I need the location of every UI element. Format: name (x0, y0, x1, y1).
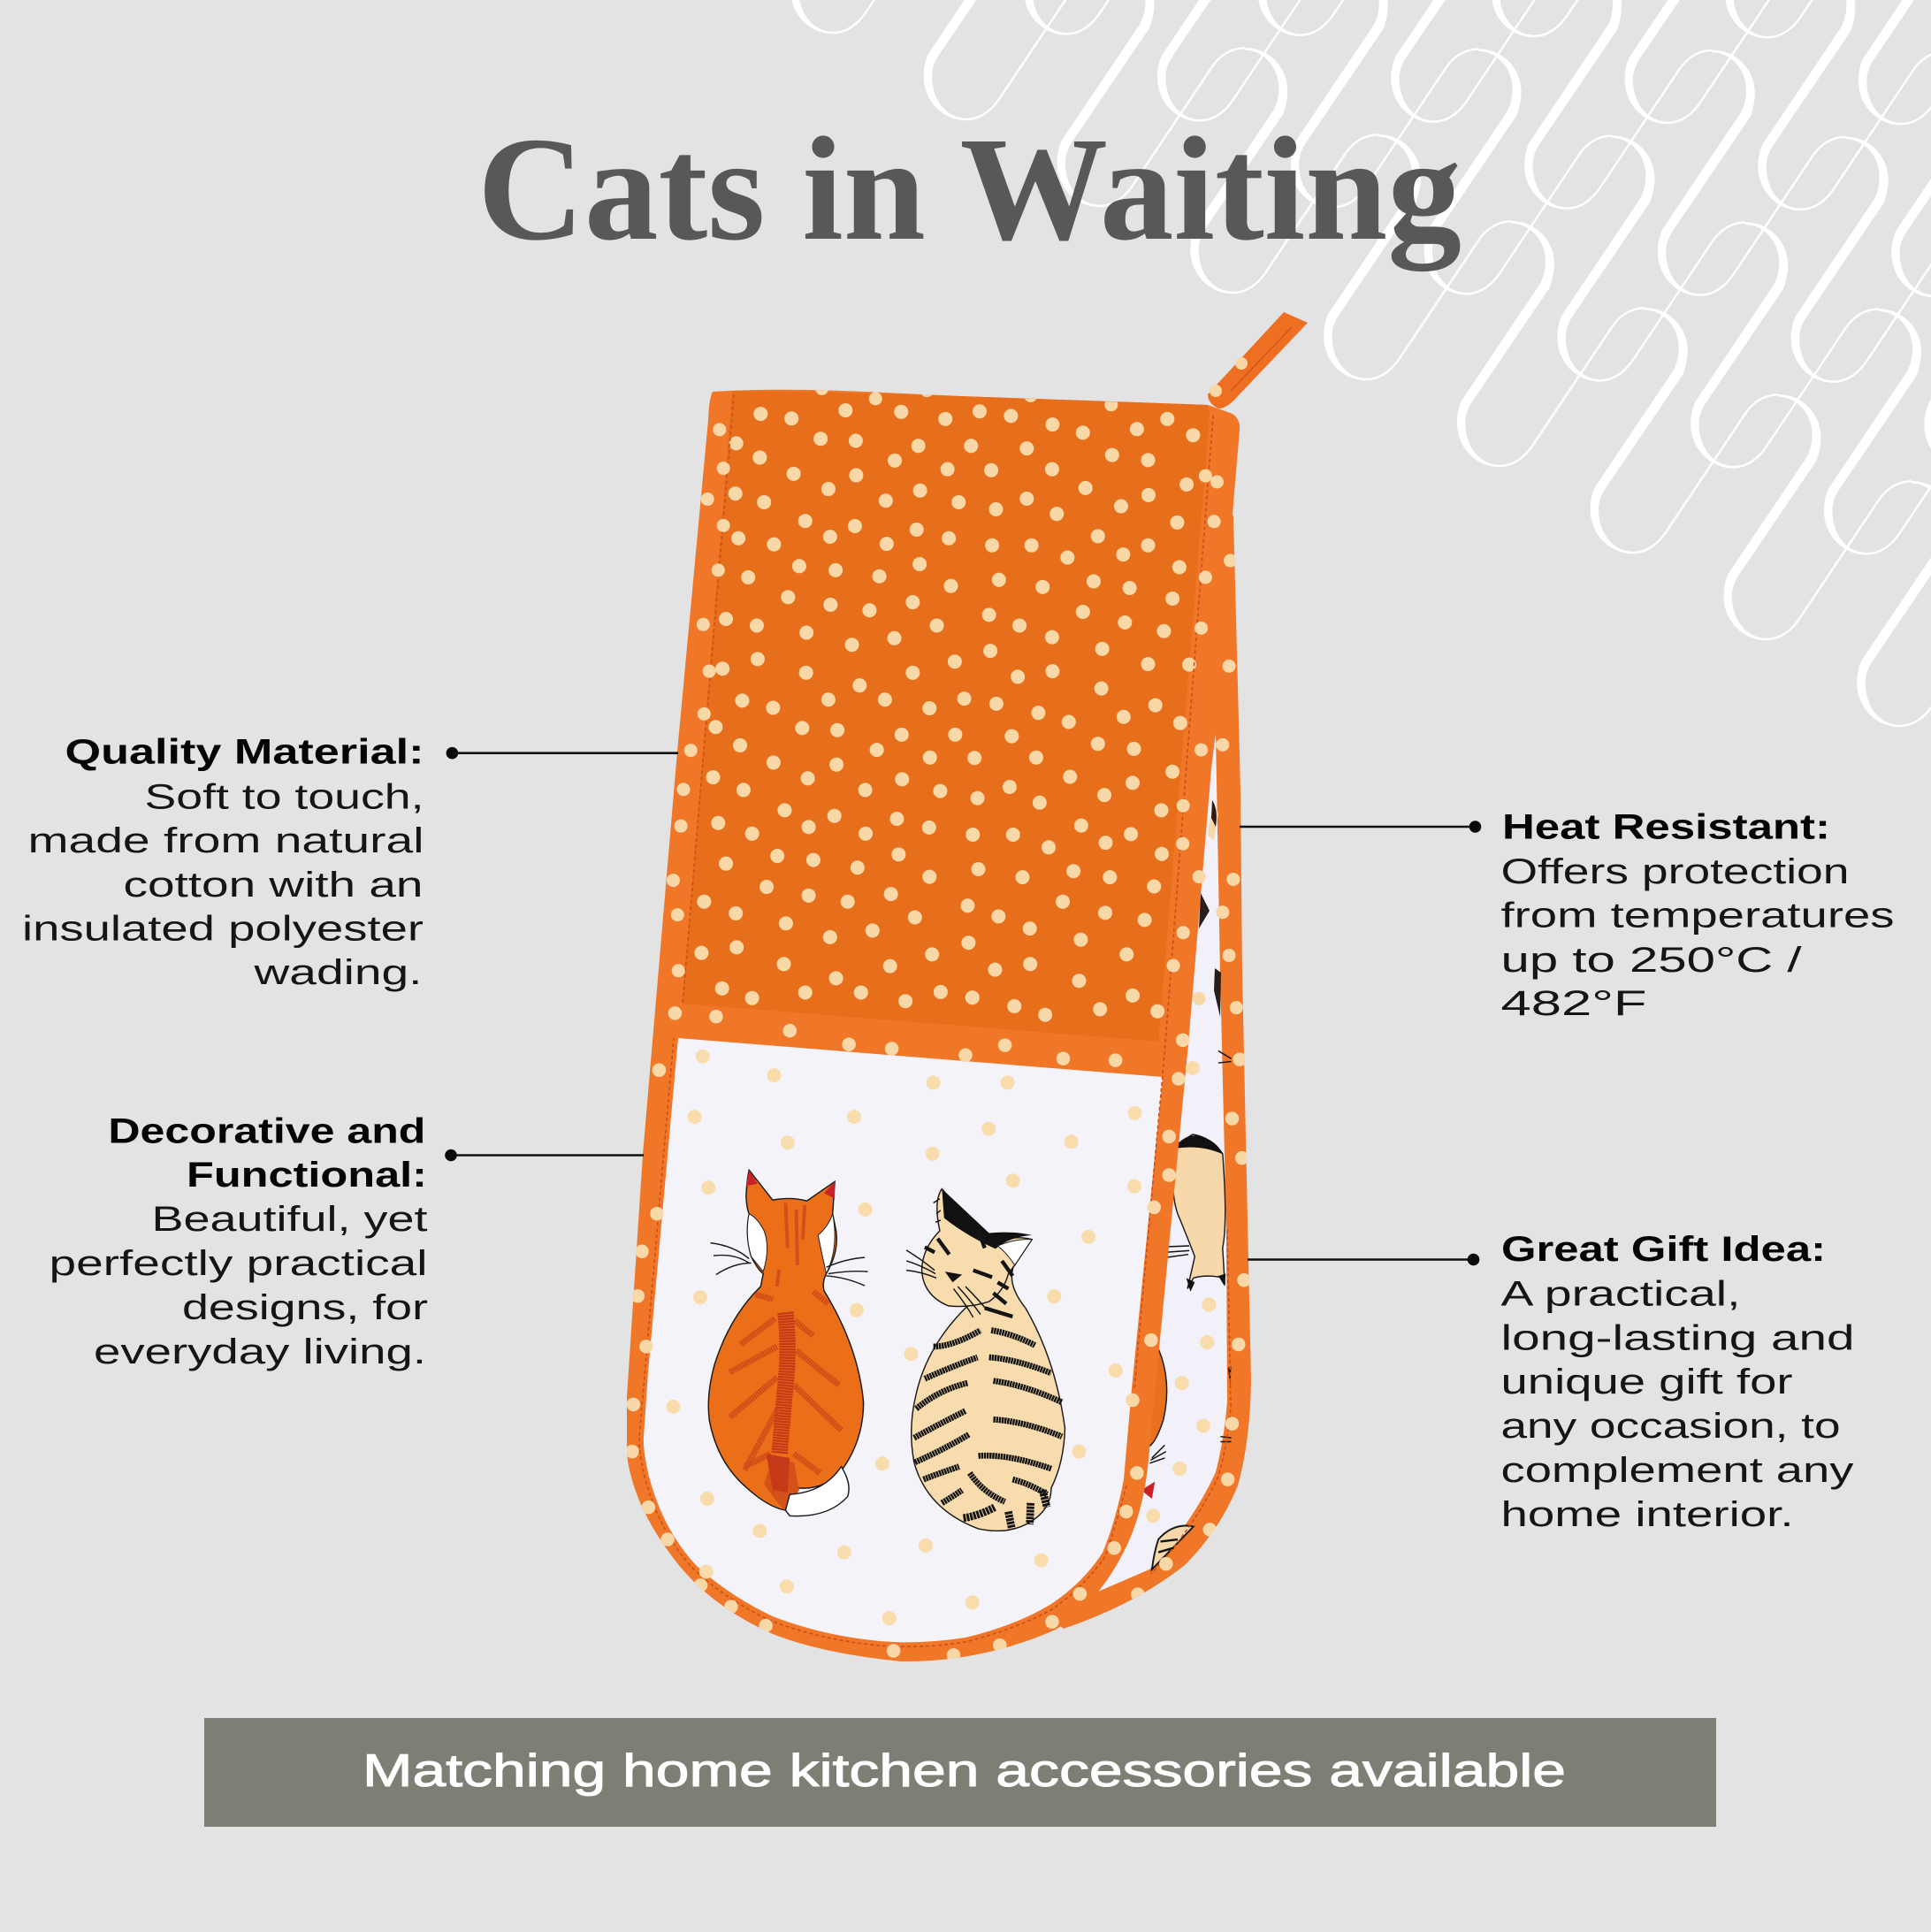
text block: quality material: made from natural (28, 821, 424, 860)
bottom banner (204, 1718, 1716, 1827)
text block: heat resistant: Heat Resistant: (1502, 808, 1830, 847)
panel polka dots (701, 410, 1193, 1015)
text block: heat resistant: from temperatures (1501, 896, 1894, 935)
pocket binding band (678, 1004, 1163, 1077)
text block: great gift idea: Great Gift Idea: (1501, 1230, 1826, 1269)
back layer of the glove (1017, 495, 1251, 1629)
text block: decorative and functional: Decorative and (108, 1112, 425, 1151)
text block: quality material: cotton with an (124, 866, 423, 905)
text block: great gift idea: unique gift for (1501, 1363, 1793, 1401)
pocket polka dots (673, 1057, 1209, 1618)
text block: decorative and functional: everyday living. (94, 1333, 426, 1371)
hanging loop (1208, 312, 1308, 409)
text block: heat resistant (1501, 808, 1894, 1023)
text block: heat resistant: 482°F (1501, 984, 1646, 1023)
text block: decorative and functional: perfectly practical (50, 1244, 428, 1283)
white pocket panel (644, 1038, 1163, 1642)
text block: great gift idea (1501, 1230, 1855, 1534)
callout line: decorative and functional (445, 1149, 644, 1161)
text block: great gift idea: A practical, (1501, 1275, 1740, 1314)
text block: decorative and functional: Beautiful, yet (152, 1200, 428, 1239)
text block: heat resistant: up to 250°C / (1501, 941, 1803, 980)
text block: quality material (22, 733, 424, 992)
text block: great gift idea: long-lasting and (1501, 1319, 1855, 1358)
callout line: great gift idea (1248, 1254, 1479, 1265)
text block: decorative and functional: Functional: (187, 1156, 427, 1195)
binding polka dots (632, 388, 1244, 1655)
decorative white loop pattern (790, 0, 1931, 727)
text block: great gift idea: any occasion, to (1501, 1407, 1841, 1446)
callout line: heat resistant (1240, 821, 1481, 833)
text block: great gift idea: home interior. (1501, 1495, 1793, 1534)
text block: quality material: insulated polyester (22, 910, 424, 949)
title: Cats in Waiting (477, 107, 1462, 271)
text block: quality material: Quality Material: (65, 733, 424, 772)
bottom banner: Matching home kitchen accessories available (363, 1745, 1566, 1797)
orange dotted upper panel (683, 391, 1210, 1044)
illustration: ginger cat (708, 1170, 867, 1516)
text block: heat resistant: Offers protection (1501, 852, 1850, 891)
text block: quality material: wading. (253, 953, 423, 992)
text block: decorative and functional: designs, for (182, 1288, 428, 1327)
text block: decorative and functional (50, 1112, 428, 1371)
stitching lines (639, 394, 1231, 1646)
text block: great gift idea: complement any (1501, 1451, 1853, 1490)
illustration: tabby cat (906, 1189, 1065, 1531)
front layer binding (627, 390, 1240, 1661)
text block: quality material: Soft to touch, (145, 777, 424, 816)
callout line: quality material (446, 747, 678, 759)
oven glove product illustration (627, 312, 1308, 1661)
